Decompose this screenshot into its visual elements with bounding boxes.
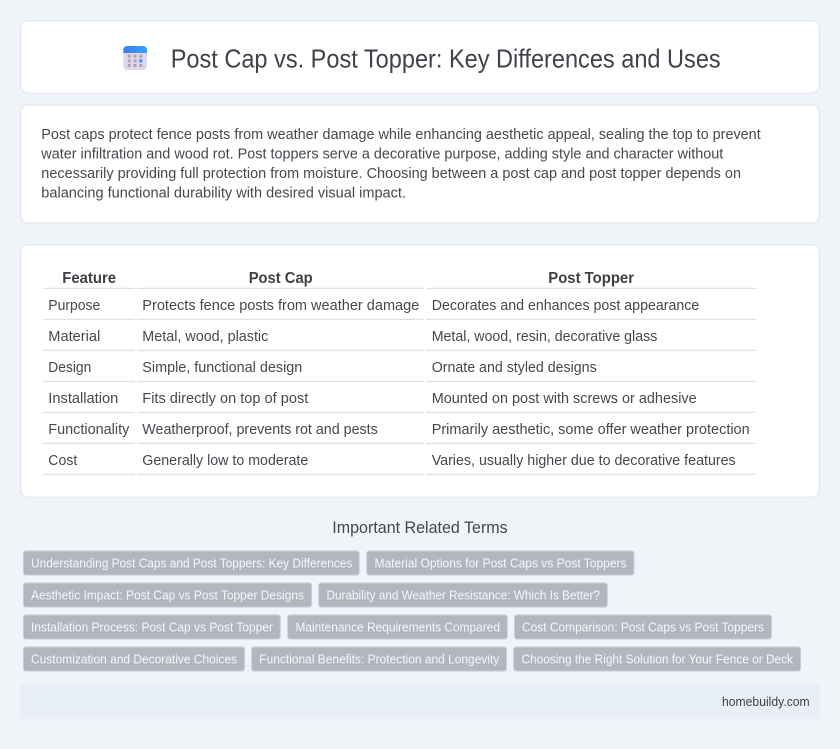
intro paragraph: necessarily providing full protection from moisture. Choosing between a post cap and post topper depends on	[41, 165, 741, 182]
row: purpose: Purpose	[48, 298, 100, 314]
panel: comparison table	[21, 245, 819, 497]
row: design: Design	[48, 360, 91, 376]
row: installation: Fits directly on top of post	[142, 391, 308, 407]
tag: Understanding Post Caps and Post Toppers: Key Differences	[31, 555, 352, 570]
row: material: Metal, wood, plastic	[142, 329, 269, 345]
tag: Durability and Weather Resistance: Which Is Better?	[326, 587, 600, 602]
title: Post Cap vs. Post Topper: Key Differences and Uses	[171, 46, 721, 74]
tag: Aesthetic Impact: Post Cap vs Post Topper Designs	[31, 587, 304, 602]
row: cost: Cost	[48, 453, 77, 469]
tag	[367, 551, 634, 575]
tag	[24, 615, 280, 639]
tag	[24, 551, 359, 575]
tag	[319, 583, 607, 607]
tag: Customization and Decorative Choices	[31, 651, 237, 666]
tag	[252, 647, 506, 671]
footer	[20, 685, 820, 719]
row: design	[48, 360, 597, 376]
heading: important related terms: Important Related Terms	[332, 519, 508, 537]
tag: Functional Benefits: Protection and Longevity	[259, 651, 500, 666]
row: material	[48, 329, 657, 345]
intro paragraph: Post caps protect fence posts from weather damage while enhancing aesthetic appeal, sealing the top to prevent	[41, 126, 761, 143]
row: cost	[48, 453, 736, 469]
table header: Feature	[62, 270, 116, 287]
row: material: Material	[48, 329, 100, 345]
panel: introduction	[21, 105, 819, 223]
tag: Cost Comparison: Post Caps vs Post Toppers	[522, 619, 764, 634]
tag: Choosing the Right Solution for Your Fence or Deck	[522, 651, 794, 666]
intro paragraph	[40, 126, 761, 201]
row: cost: Varies, usually higher due to decorative features	[432, 453, 736, 469]
tag	[514, 647, 800, 671]
row: purpose: Protects fence posts from weather damage	[142, 298, 419, 314]
tag: Material Options for Post Caps vs Post Toppers	[374, 555, 626, 570]
tag	[288, 615, 507, 639]
table header: Post Topper	[548, 270, 634, 287]
row: purpose: Decorates and enhances post appearance	[432, 298, 699, 314]
related terms tags	[24, 551, 800, 671]
table header: Post Cap	[249, 270, 313, 287]
row: functionality	[48, 422, 750, 438]
row: design: Ornate and styled designs	[432, 360, 597, 376]
row: cost: Generally low to moderate	[142, 453, 308, 469]
row: functionality: Primarily aesthetic, some offer weather protection	[432, 422, 750, 438]
tag	[514, 615, 772, 639]
footer: homebuildy.com	[722, 694, 810, 709]
panel: header	[21, 21, 819, 93]
row: installation: Installation	[48, 391, 118, 407]
row: functionality: Weatherproof, prevents rot and pests	[142, 422, 378, 438]
intro paragraph: balancing functional durability with desired visual impact.	[41, 184, 406, 201]
intro paragraph: water infiltration and wood rot. Post toppers serve a decorative purpose, adding style and character without	[40, 145, 724, 162]
tag	[24, 647, 244, 671]
row: material: Metal, wood, resin, decorative glass	[432, 329, 657, 345]
row: functionality: Functionality	[48, 422, 130, 438]
tag: Maintenance Requirements Compared	[296, 619, 500, 634]
icon: calendar	[123, 46, 147, 70]
row: installation	[48, 391, 697, 407]
row: installation: Mounted on post with screws or adhesive	[432, 391, 697, 407]
tag	[24, 583, 312, 607]
table header	[62, 270, 634, 287]
row: design: Simple, functional design	[142, 360, 302, 376]
tag: Installation Process: Post Cap vs Post Topper	[31, 619, 274, 634]
row: purpose	[48, 298, 699, 314]
